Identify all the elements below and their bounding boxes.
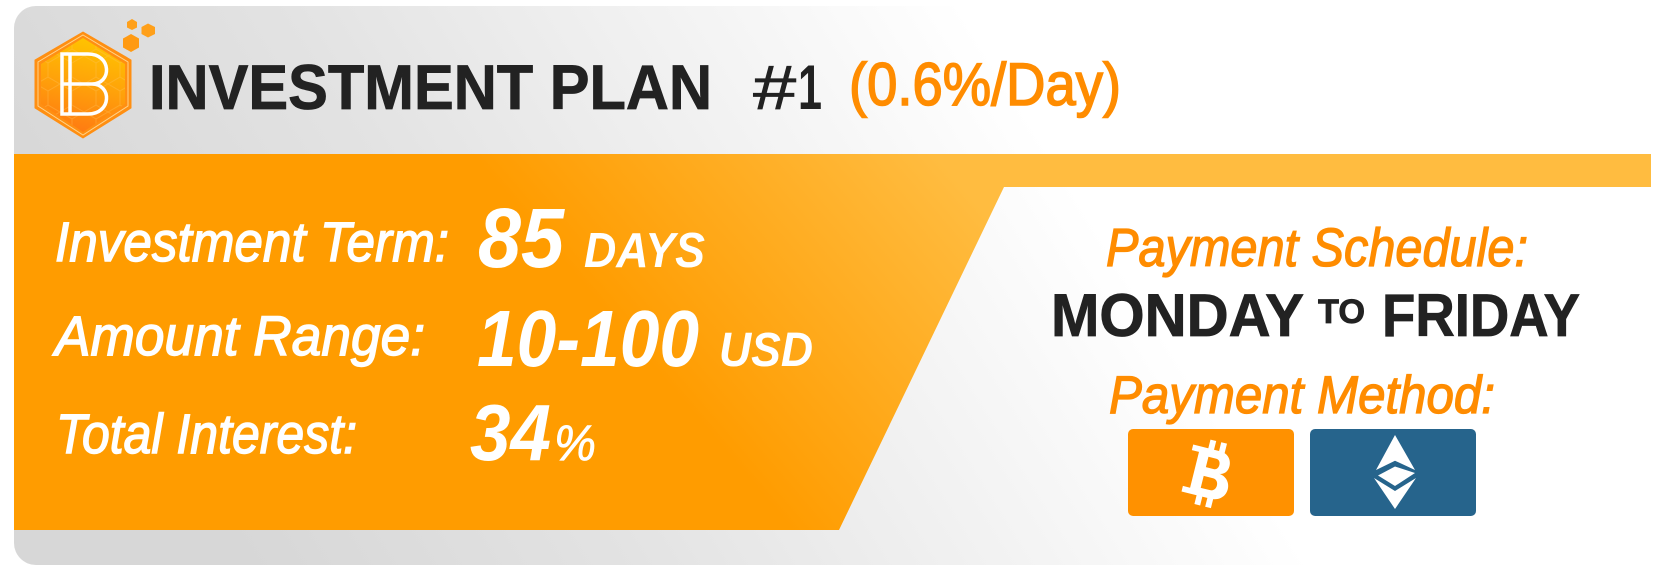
amount range row: 10-100 <box>477 294 699 383</box>
investment term row: Investment Term: <box>55 210 449 273</box>
amount range row <box>52 294 813 383</box>
icon: bitcoin button <box>1128 429 1294 516</box>
amount range row: Amount Range: <box>52 304 425 367</box>
heading: payment method: Payment Method: <box>1109 366 1495 425</box>
heading: payment schedule: Payment Schedule: <box>1106 218 1528 278</box>
text block: monday to friday: FRIDAY <box>1382 282 1580 349</box>
heading: title: # <box>752 54 797 123</box>
total interest row: % <box>554 415 596 471</box>
investment term row: DAYS <box>584 224 705 278</box>
total interest row: Total Interest: <box>56 402 357 465</box>
icon: ethereum button <box>1310 429 1476 516</box>
text block: monday to friday: TO <box>1318 293 1365 331</box>
investment term row: 85 <box>478 191 565 285</box>
total interest row <box>56 388 596 477</box>
amount range row: USD <box>719 324 813 377</box>
text block: monday to friday <box>1051 282 1580 349</box>
icon: hexagon B logo <box>35 19 155 138</box>
panel: orange band <box>14 154 1651 530</box>
heading: title: (0.6%/Day) <box>849 51 1121 118</box>
text block: monday to friday: MONDAY <box>1051 282 1304 349</box>
investment term row <box>55 191 705 285</box>
heading: title: 1 <box>798 53 822 123</box>
heading: title <box>149 51 1121 123</box>
heading: title: INVESTMENT PLAN <box>149 53 712 123</box>
text block: plan details <box>52 191 813 477</box>
total interest row: 34 <box>470 388 551 477</box>
